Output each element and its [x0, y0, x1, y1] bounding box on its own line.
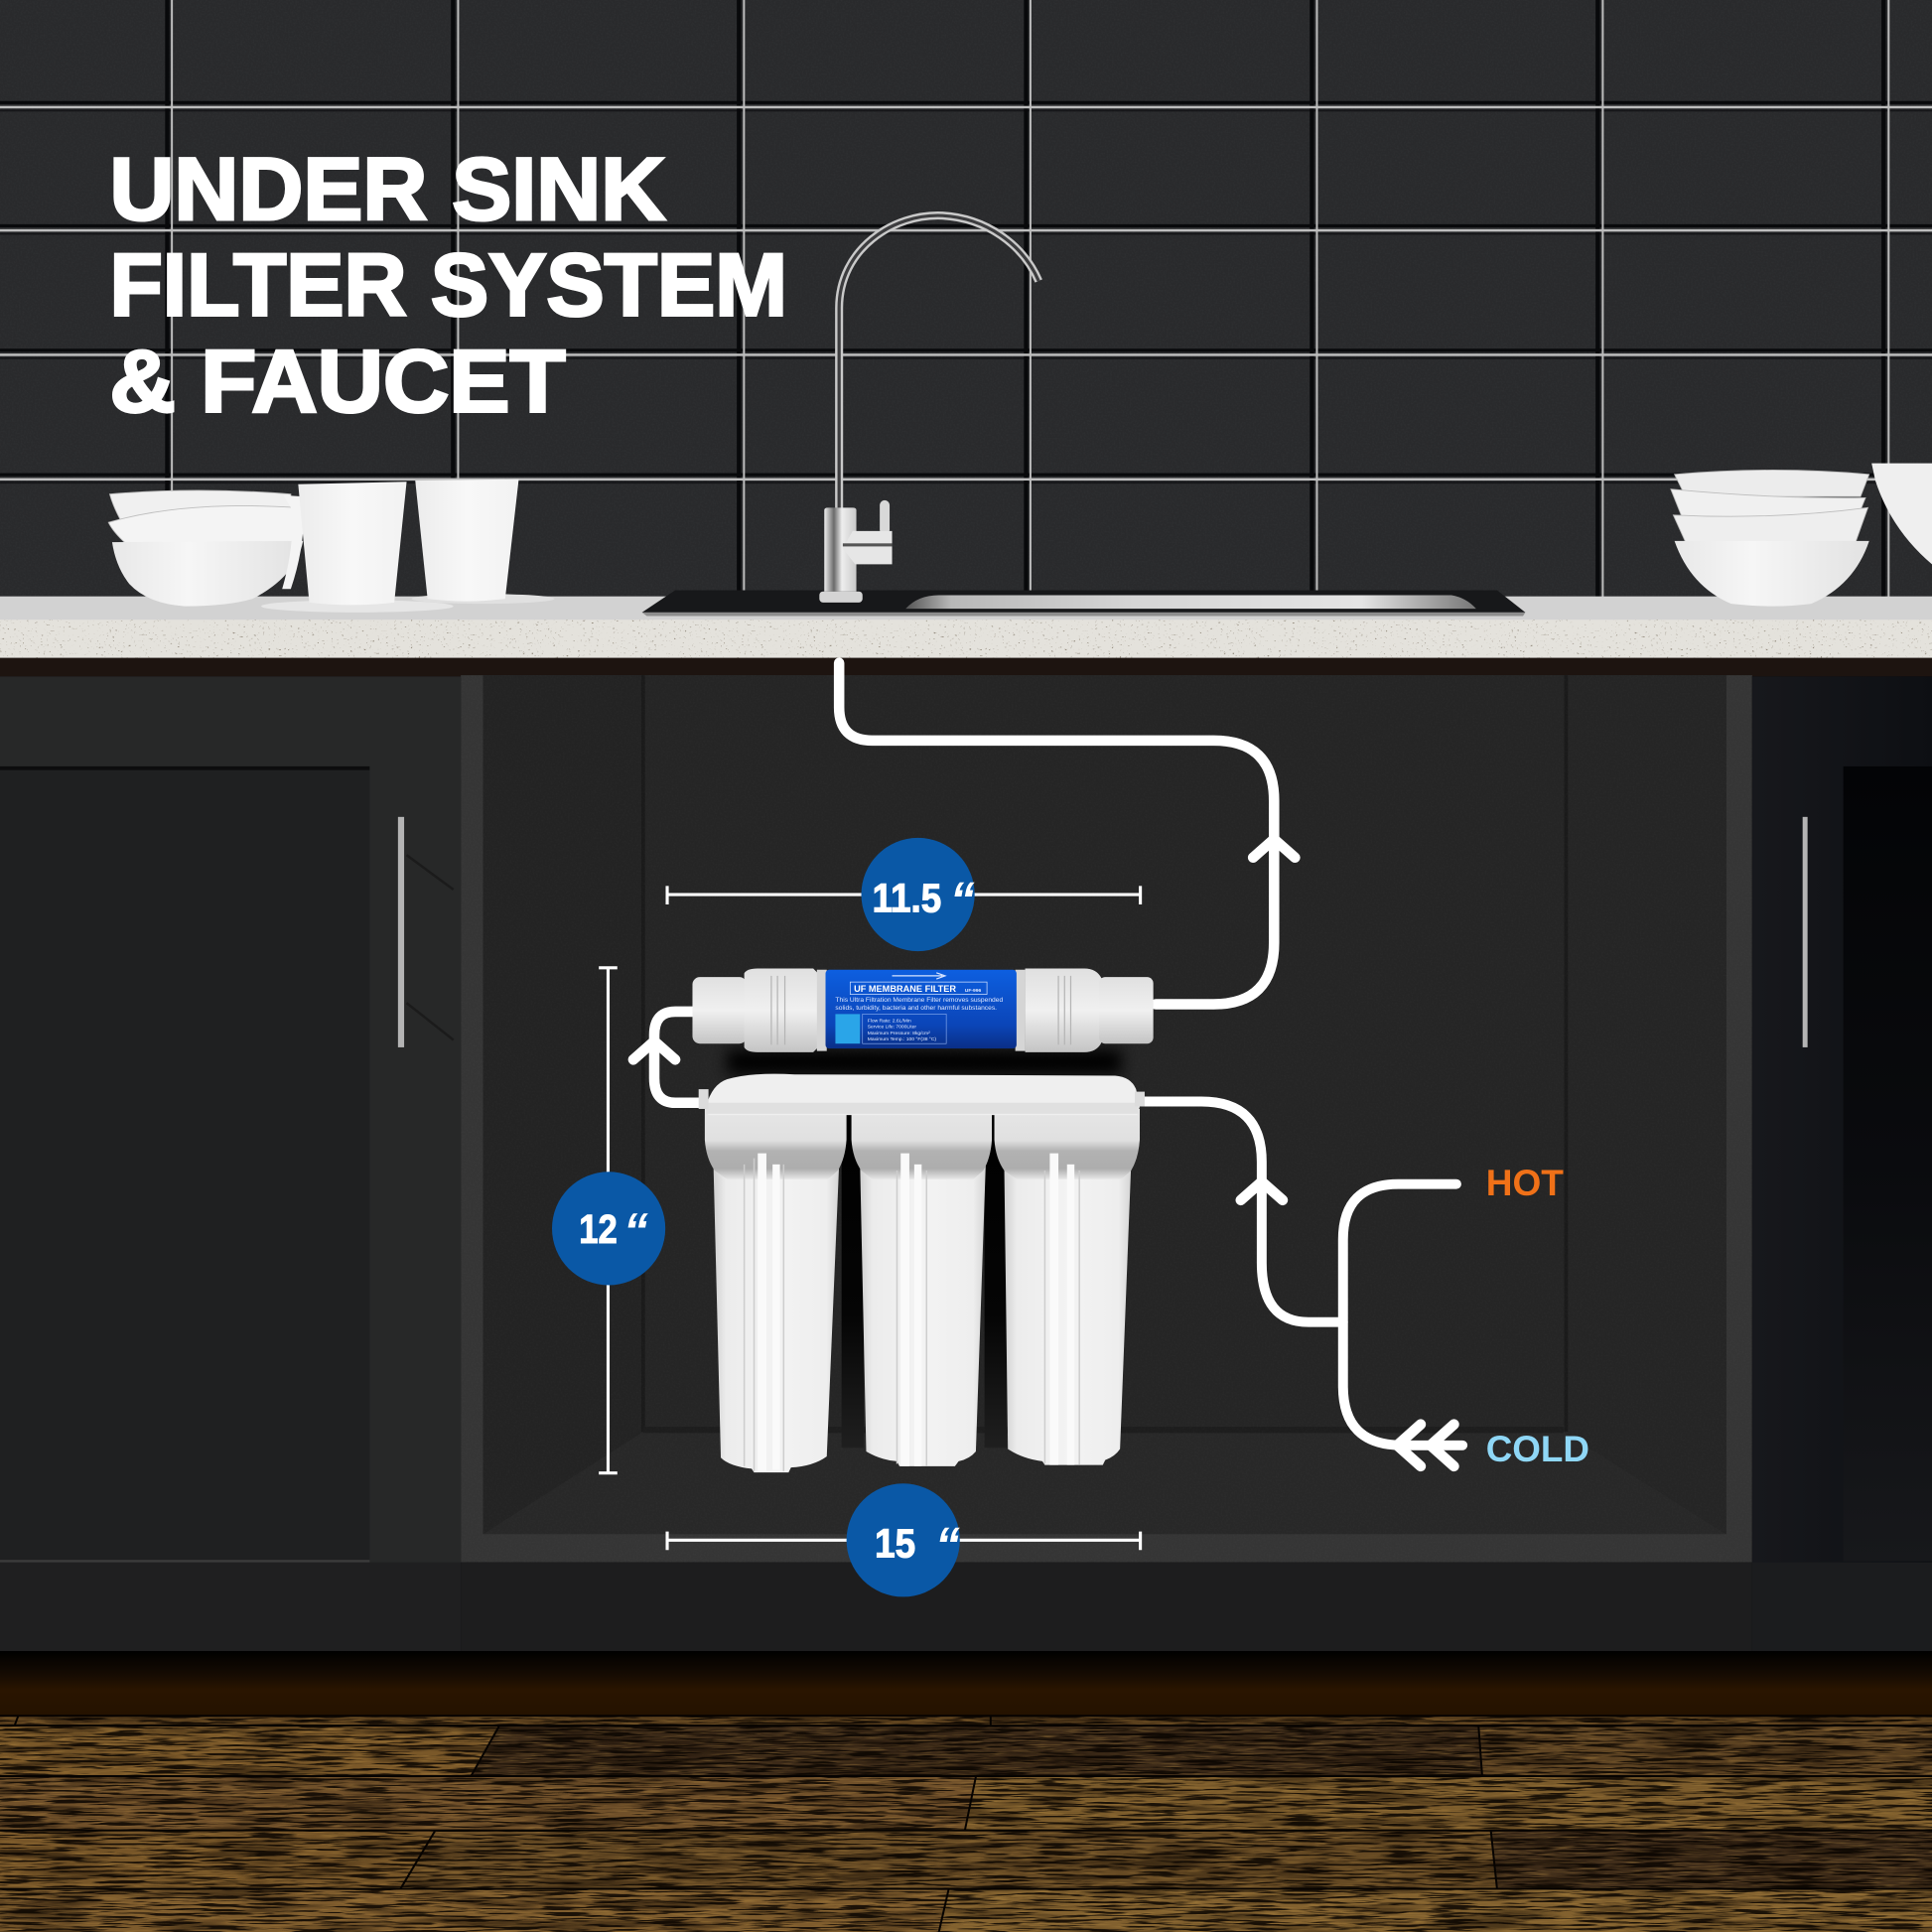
- dimension: width 15 in: 15: [875, 1521, 915, 1567]
- cabinet left door: [0, 676, 461, 1651]
- cabinet open interior: [461, 675, 1752, 1651]
- shadow behind filter unit: [727, 1049, 1121, 1448]
- UF membrane filter: [692, 968, 1154, 1052]
- dimension: width 11.5 in: [666, 838, 1141, 951]
- saucers under cups: [261, 594, 554, 613]
- right cartridge: [995, 1109, 1140, 1465]
- arrow: up to housing: [1241, 1181, 1283, 1200]
- pipe: inlet to filter: [1144, 1102, 1343, 1322]
- right stacked bowls: [1671, 464, 1932, 607]
- housing head: [706, 1074, 1140, 1115]
- filter blue label: Service Life: 7000Liter: [868, 1025, 916, 1031]
- filter blue label: UF MEMBRANE FILTER: [854, 984, 957, 994]
- wood floor: [0, 1716, 1932, 1932]
- tiled wall background: [0, 0, 1932, 599]
- dimension: height 12 in: [552, 967, 665, 1473]
- title: & FAUCET: [109, 332, 566, 431]
- pipe: filter to faucet: [839, 663, 1274, 1004]
- toe kick: [0, 1651, 1932, 1717]
- door handle left: [398, 817, 404, 1047]
- dimension: width 11.5 in: 11.5: [873, 875, 941, 920]
- left stacked bowls: [108, 490, 304, 607]
- arrow: cold double chevron: [1397, 1425, 1453, 1466]
- dimension: height 12 in: 12: [579, 1206, 618, 1252]
- dimension: height 12 in: “: [623, 1203, 648, 1259]
- door handle right: [1803, 817, 1808, 1047]
- pipe: hot and cold branch: [1343, 1184, 1462, 1446]
- filter blue label: Flow Rate: 2.6L/Min: [868, 1018, 911, 1024]
- filter blue label: solids, turbidity, bacteria and other harmful substances.: [835, 1006, 997, 1012]
- filter blue label: [826, 970, 1017, 1048]
- dimension: width 15 in: [666, 1483, 1141, 1596]
- dimension: width 11.5 in: “: [950, 872, 975, 927]
- countertop: [0, 597, 1932, 676]
- title: FILTER SYSTEM: [109, 235, 787, 335]
- filter blue label: Maximum Pressure: 8kg/cm²: [868, 1031, 930, 1036]
- label: cold: COLD: [1486, 1428, 1589, 1469]
- label: hot: HOT: [1486, 1162, 1564, 1203]
- middle cartridge: [852, 1109, 992, 1466]
- filter blue label: UF-996: [965, 988, 982, 994]
- title: UNDER SINK: [109, 139, 665, 238]
- faucet sink: [642, 590, 1525, 617]
- arrow: left loop: [633, 1041, 675, 1059]
- filter blue label: This Ultra Filtration Membrane Filter removes suspended: [835, 998, 1003, 1004]
- arrow: up to faucet: [1253, 839, 1295, 858]
- pipe: between housing and membrane: [654, 1012, 702, 1103]
- water lines: [633, 663, 1462, 1466]
- left cartridge: [705, 1109, 847, 1472]
- three cartridge filter housing: [699, 1074, 1145, 1472]
- title: [109, 139, 787, 431]
- cabinet right door: [1752, 676, 1932, 1651]
- chrome gooseneck faucet: [819, 215, 1038, 603]
- dimension: width 15 in: “: [935, 1518, 960, 1574]
- white cups: [298, 480, 518, 605]
- filter blue label: Maximum Temp.: 100 °F(38 °C): [868, 1036, 936, 1042]
